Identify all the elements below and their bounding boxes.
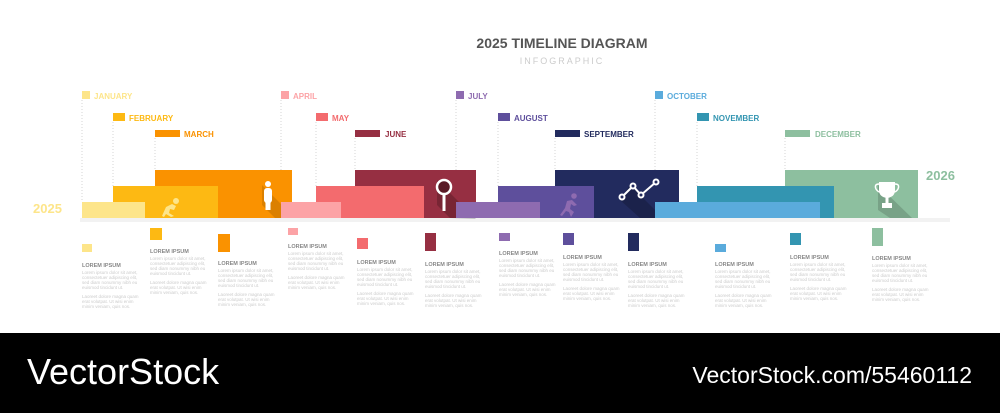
bottom text columns: erat volutpat. Ut wisi enim [499, 287, 551, 292]
bottom text columns: consectetuer adipiscing elit, [82, 275, 137, 280]
bottom text columns: minim veniam, quis nos. [288, 285, 336, 290]
bottom text columns: LOREM IPSUM [150, 249, 189, 255]
bottom text columns: LOREM IPSUM [715, 262, 754, 268]
bottom text columns: euismod tincidunt ut. [218, 283, 259, 288]
month labels: JANUARY [94, 92, 133, 101]
bottom text columns: Lorem ipsum dolor sit amet, [82, 270, 138, 275]
bottom text columns: consectetuer adipiscing elit, [715, 274, 770, 279]
bottom text columns: sed diam nonummy nibh eu [425, 279, 481, 284]
bottom text columns: minim veniam, quis nos. [628, 303, 676, 308]
bottom text columns: consectetuer adipiscing elit, [218, 273, 273, 278]
bottom text columns: Laoreet dolore magna quam [82, 294, 139, 299]
bottom text columns: LOREM IPSUM [628, 262, 667, 268]
month labels: SEPTEMBER [584, 130, 634, 139]
bottom text columns: minim veniam, quis nos. [218, 302, 266, 307]
month labels: JULY [468, 92, 488, 101]
bottom text columns: euismod tincidunt ut. [288, 266, 329, 271]
month labels [82, 91, 861, 202]
bottom text columns: erat volutpat. Ut wisi enim [425, 298, 477, 303]
month labels: JUNE [385, 130, 407, 139]
bottom text columns: LOREM IPSUM [425, 262, 464, 268]
bottom text columns: erat volutpat. Ut wisi enim [82, 299, 134, 304]
icon: sprinter [560, 193, 577, 217]
bottom text columns: sed diam nonummy nibh eu [628, 279, 684, 284]
bottom text columns: consectetuer adipiscing elit, [628, 274, 683, 279]
bottom text columns: LOREM IPSUM [790, 255, 829, 261]
bottom text columns: consectetuer adipiscing elit, [790, 267, 845, 272]
bottom text columns: minim veniam, quis nos. [563, 296, 611, 301]
bottom text columns: Laoreet dolore magna quam [499, 282, 556, 287]
bottom text columns: LOREM IPSUM [563, 255, 602, 261]
bottom text columns: erat volutpat. Ut wisi enim [563, 291, 615, 296]
bottom text columns: Lorem ipsum dolor sit amet, [628, 269, 684, 274]
bottom text columns: Laoreet dolore magna quam [715, 293, 772, 298]
bottom text columns: erat volutpat. Ut wisi enim [357, 296, 409, 301]
bottom text columns: euismod tincidunt ut. [872, 278, 913, 283]
bottom text columns: erat volutpat. Ut wisi enim [715, 298, 767, 303]
long shadows [262, 185, 292, 218]
bottom text columns: minim veniam, quis nos. [790, 296, 838, 301]
footer bar [0, 333, 1000, 413]
month labels: DECEMBER [815, 130, 861, 139]
bottom text columns: consectetuer adipiscing elit, [150, 261, 205, 266]
month labels: FEBRUARY [129, 114, 174, 123]
bottom text columns: Laoreet dolore magna quam [288, 275, 345, 280]
bottom text columns: euismod tincidunt ut. [425, 284, 466, 289]
bottom text columns: euismod tincidunt ut. [790, 277, 831, 282]
bottom text columns: Lorem ipsum dolor sit amet, [563, 262, 619, 267]
bottom text columns: sed diam nonummy nibh eu [357, 277, 413, 282]
bottom text columns: sed diam nonummy nibh eu [715, 279, 771, 284]
bottom text columns: sed diam nonummy nibh eu [790, 272, 846, 277]
bottom text columns: Lorem ipsum dolor sit amet, [218, 268, 274, 273]
title: 2025 TIMELINE DIAGRAM [476, 35, 648, 51]
bottom text columns: LOREM IPSUM [872, 256, 911, 262]
bottom text columns: sed diam nonummy nibh eu [150, 266, 206, 271]
bottom text columns: sed diam nonummy nibh eu [499, 268, 555, 273]
bottom text columns: Lorem ipsum dolor sit amet, [872, 263, 928, 268]
bottom text columns: euismod tincidunt ut. [715, 284, 756, 289]
icon: line chart [620, 180, 658, 200]
bottom text columns: erat volutpat. Ut wisi enim [218, 297, 270, 302]
bottom text columns: euismod tincidunt ut. [563, 277, 604, 282]
bottom text columns: consectetuer adipiscing elit, [425, 274, 480, 279]
bottom text columns: Lorem ipsum dolor sit amet, [357, 267, 413, 272]
icon: trophy [875, 182, 899, 208]
bottom text columns: Laoreet dolore magna quam [218, 292, 275, 297]
subtitle: INFOGRAPHIC [520, 56, 604, 66]
bottom text columns: consectetuer adipiscing elit, [563, 267, 618, 272]
bottom text columns: Laoreet dolore magna quam [790, 286, 847, 291]
bottom text columns: Laoreet dolore magna quam [150, 280, 207, 285]
bottom text columns: minim veniam, quis nos. [357, 301, 405, 306]
bottom text columns: LOREM IPSUM [357, 260, 396, 266]
bottom text columns: sed diam nonummy nibh eu [563, 272, 619, 277]
bottom text columns: erat volutpat. Ut wisi enim [872, 292, 924, 297]
month labels: NOVEMBER [713, 114, 759, 123]
bottom text columns: consectetuer adipiscing elit, [499, 263, 554, 268]
bottom text columns: Lorem ipsum dolor sit amet, [288, 251, 344, 256]
year 2025: 2025 [33, 201, 62, 216]
bottom text columns: erat volutpat. Ut wisi enim [628, 298, 680, 303]
month labels: AUGUST [514, 114, 548, 123]
bottom text columns: euismod tincidunt ut. [357, 282, 398, 287]
bottom text columns: minim veniam, quis nos. [715, 303, 763, 308]
bottom text columns: sed diam nonummy nibh eu [872, 273, 928, 278]
bottom text columns: euismod tincidunt ut. [499, 273, 540, 278]
bottom text columns: euismod tincidunt ut. [628, 284, 669, 289]
bottom text columns: erat volutpat. Ut wisi enim [790, 291, 842, 296]
baseline shadow [80, 218, 950, 222]
bottom text columns: erat volutpat. Ut wisi enim [150, 285, 202, 290]
bottom text columns: erat volutpat. Ut wisi enim [288, 280, 340, 285]
month labels: MAY [332, 114, 350, 123]
bottom text columns [82, 228, 929, 309]
bottom text columns: Laoreet dolore magna quam [357, 291, 414, 296]
year 2026: 2026 [926, 168, 955, 183]
footer bar: VectorStock.com/55460112 [692, 362, 972, 388]
bottom text columns: LOREM IPSUM [218, 261, 257, 267]
bottom text columns: sed diam nonummy nibh eu [288, 261, 344, 266]
bottom text columns: consectetuer adipiscing elit, [357, 272, 412, 277]
bottom text columns: sed diam nonummy nibh eu [82, 280, 138, 285]
bottom text columns: minim veniam, quis nos. [425, 303, 473, 308]
month labels: MARCH [184, 130, 214, 139]
month labels: APRIL [293, 92, 317, 101]
bottom text columns: sed diam nonummy nibh eu [218, 278, 274, 283]
bottom text columns: minim veniam, quis nos. [499, 292, 547, 297]
icon: magnifier [437, 180, 451, 211]
bottom text columns: Laoreet dolore magna quam [872, 287, 929, 292]
bottom text columns: Laoreet dolore magna quam [425, 293, 482, 298]
bottom text columns: LOREM IPSUM [499, 251, 538, 257]
bottom text columns: LOREM IPSUM [288, 244, 327, 250]
bottom text columns: Lorem ipsum dolor sit amet, [425, 269, 481, 274]
bottom text columns: Lorem ipsum dolor sit amet, [150, 256, 206, 261]
bottom text columns: minim veniam, quis nos. [150, 290, 198, 295]
bottom text columns: Lorem ipsum dolor sit amet, [715, 269, 771, 274]
bottom text columns: consectetuer adipiscing elit, [872, 268, 927, 273]
bottom text columns: Laoreet dolore magna quam [563, 286, 620, 291]
icon: person [264, 181, 272, 210]
bottom text columns: Lorem ipsum dolor sit amet, [790, 262, 846, 267]
icon: crouching runner [162, 198, 179, 217]
bottom text columns: euismod tincidunt ut. [82, 285, 123, 290]
month labels: OCTOBER [667, 92, 707, 101]
bottom text columns: LOREM IPSUM [82, 263, 121, 269]
bottom text columns: Lorem ipsum dolor sit amet, [499, 258, 555, 263]
bottom text columns: Laoreet dolore magna quam [628, 293, 685, 298]
bottom text columns: consectetuer adipiscing elit, [288, 256, 343, 261]
bottom text columns: euismod tincidunt ut. [150, 271, 191, 276]
bottom text columns: minim veniam, quis nos. [872, 297, 920, 302]
footer bar: VectorStock [27, 351, 220, 392]
bars [82, 170, 918, 219]
bottom text columns: minim veniam, quis nos. [82, 304, 130, 309]
